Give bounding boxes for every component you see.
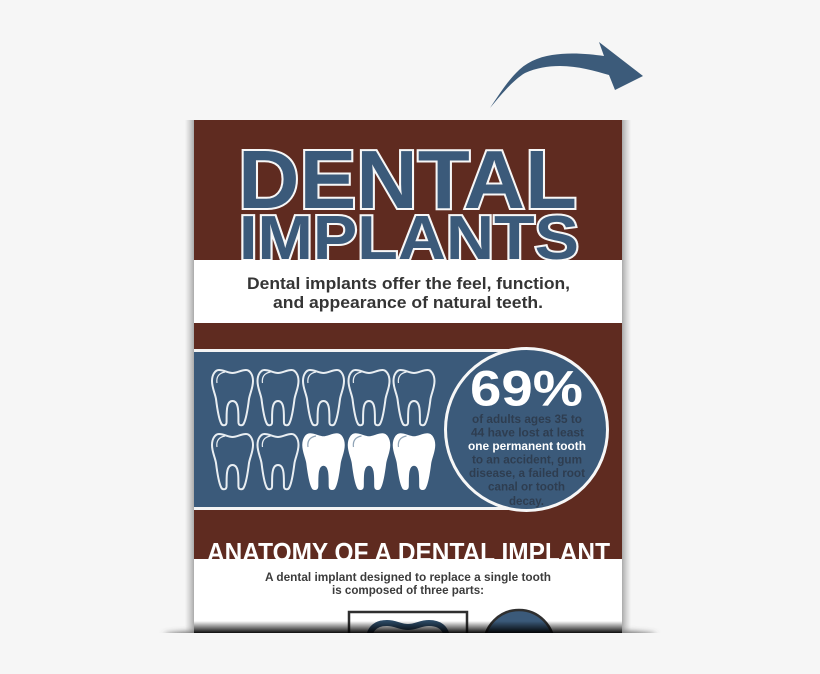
arrow bbox=[490, 42, 643, 108]
anatomy intro text: is composed of three parts: bbox=[332, 585, 484, 597]
intro band bbox=[194, 260, 622, 323]
panel background bbox=[194, 120, 622, 559]
statistic description: to an accident, gum bbox=[472, 454, 582, 466]
statistic number: 69% bbox=[470, 360, 583, 416]
diagram circle bbox=[485, 608, 553, 633]
tooth grid bbox=[212, 370, 434, 489]
title: DENTAL bbox=[238, 133, 577, 226]
statistic description: canal or tooth bbox=[488, 482, 565, 494]
statistic description: of adults ages 35 to bbox=[472, 414, 582, 426]
diagram box with tooth bbox=[348, 610, 468, 633]
heading: anatomy: ANATOMY OF A DENTAL IMPLANT bbox=[207, 537, 610, 567]
panel shadows bbox=[164, 120, 656, 642]
panel: tooth statistic band bbox=[194, 348, 608, 510]
intro text: Dental implants offer the feel, function, bbox=[247, 275, 570, 293]
anatomy intro text: A dental implant designed to replace a single tooth bbox=[265, 572, 551, 584]
statistic description: one permanent tooth bbox=[468, 441, 586, 453]
statistic description: disease, a failed root bbox=[469, 468, 585, 480]
statistic description: 44 have lost at least bbox=[471, 428, 584, 440]
statistic description: decay. bbox=[509, 496, 544, 508]
bottom page fade bbox=[194, 621, 622, 633]
intro text: and appearance of natural teeth. bbox=[273, 294, 543, 312]
title: IMPLANTS bbox=[239, 204, 579, 273]
intro text bbox=[247, 275, 570, 312]
panel: infographic page bbox=[194, 120, 622, 674]
statistic description bbox=[468, 414, 586, 508]
panel: anatomy section bbox=[194, 559, 622, 633]
anatomy intro text bbox=[265, 572, 551, 597]
statistic circle bbox=[446, 348, 608, 510]
title bbox=[241, 149, 578, 260]
